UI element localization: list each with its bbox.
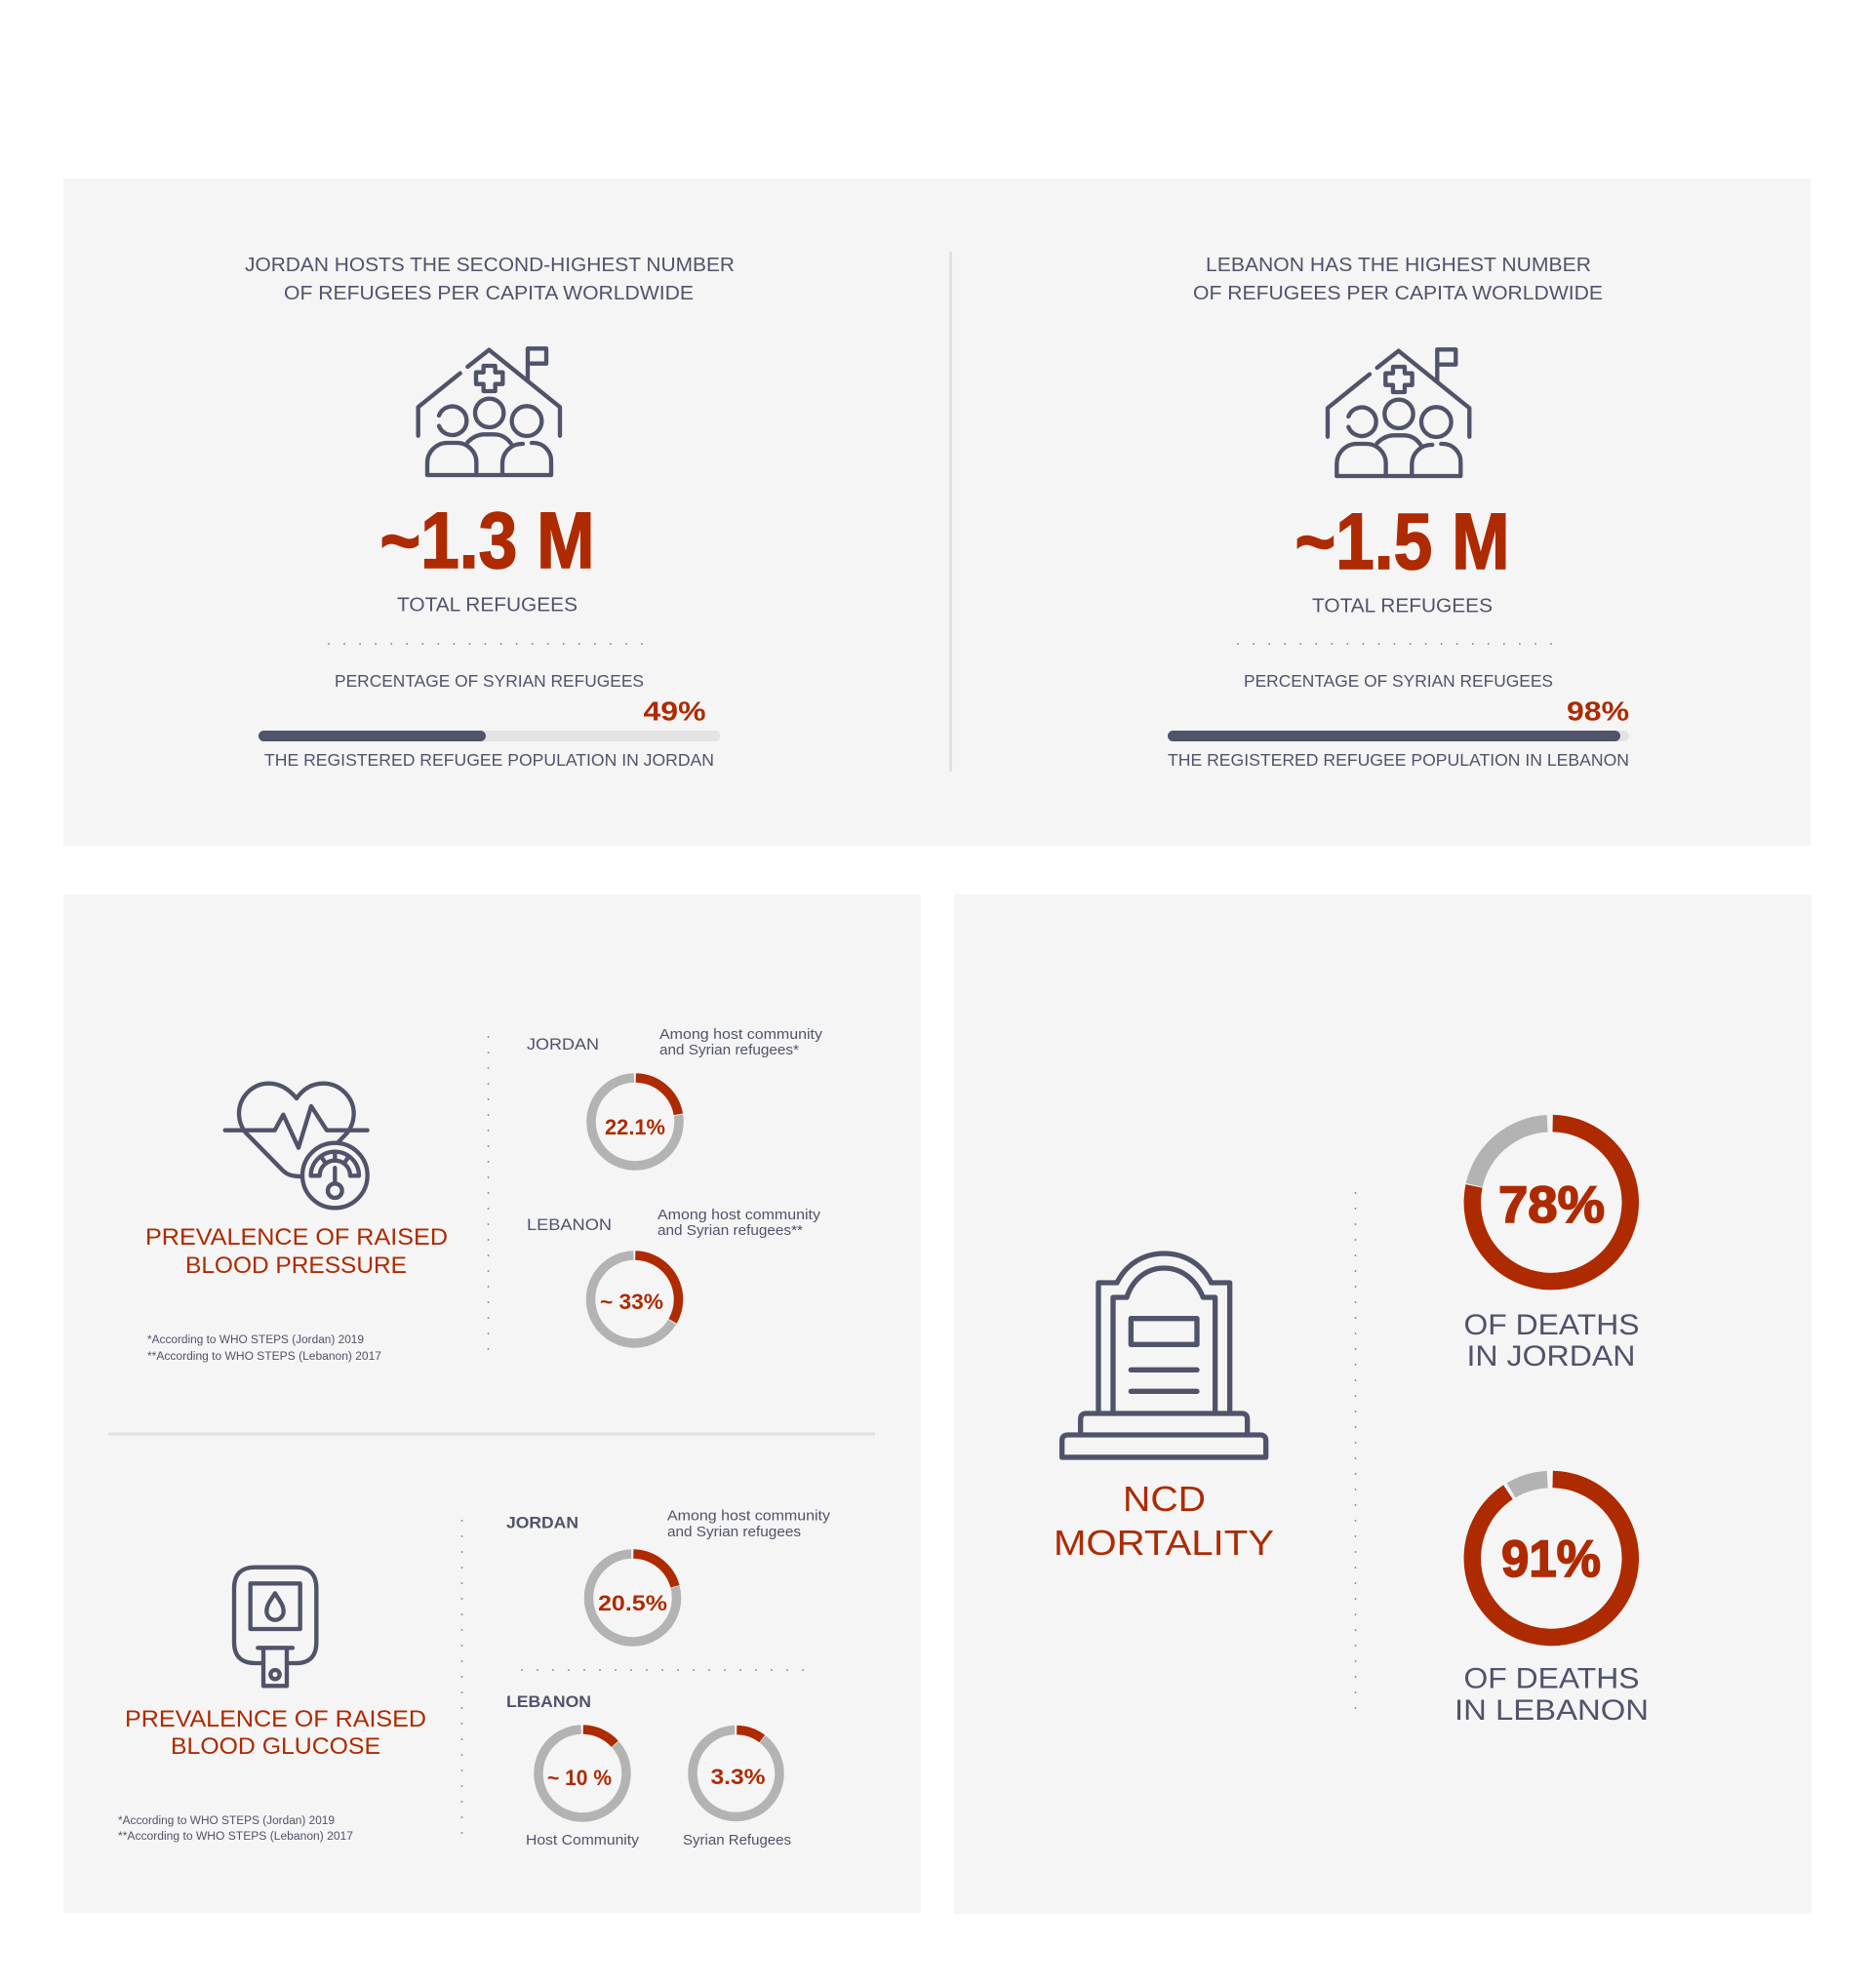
donut: Lebanon deaths 91 percent: 91% <box>1501 1531 1601 1588</box>
icon: heart with gauge <box>225 1084 368 1208</box>
icon: refugee shelter Lebanon <box>1328 349 1469 476</box>
donut: Jordan glucose 20.5 percent: 20.5% <box>598 1591 667 1615</box>
note: Jordan population <box>659 1027 823 1058</box>
panel: refugee numbers <box>63 179 1811 846</box>
heading: Lebanon refugees: LEBANON HAS THE HIGHEST NUMBER <box>1206 255 1591 276</box>
donut: host community about 10 percent <box>538 1729 627 1818</box>
heading: Jordan refugees: OF REFUGEES PER CAPITA WORLDWIDE <box>284 283 694 304</box>
label: Syrian refugees: Syrian Refugees <box>683 1833 791 1849</box>
note: Lebanon population: Among host community <box>658 1208 821 1223</box>
stat: 98 percent: 98% <box>1567 696 1629 726</box>
heading: Lebanon refugees: OF REFUGEES PER CAPITA WORLDWIDE <box>1193 283 1603 304</box>
label: Lebanon blood pressure: LEBANON <box>527 1216 612 1234</box>
label: total refugees Lebanon: TOTAL REFUGEES <box>1312 595 1493 616</box>
donut: Jordan blood pressure 22.1 percent: 22.1% <box>605 1115 665 1139</box>
label: deaths in Jordan: IN JORDAN <box>1467 1340 1635 1372</box>
footnotes: blood glucose <box>118 1815 353 1843</box>
stat: Lebanon total refugees: ~1.5 M <box>1295 497 1510 586</box>
label: total refugees Jordan: TOTAL REFUGEES <box>397 595 578 616</box>
label: deaths in Lebanon <box>1455 1662 1649 1727</box>
footnotes: blood glucose: **According to WHO STEPS (Lebanon) 2017 <box>118 1831 353 1843</box>
caption: registered population Lebanon: THE REGISTERED REFUGEE POPULATION IN LEBANON <box>1168 750 1629 770</box>
title: NCD mortality: MORTALITY <box>1054 1523 1274 1563</box>
note: Jordan population: Among host community <box>659 1027 823 1043</box>
icon: glucose meter <box>234 1568 316 1686</box>
icon: tombstone <box>1062 1253 1266 1457</box>
title: NCD mortality: NCD <box>1123 1479 1206 1519</box>
label: deaths in Jordan: OF DEATHS <box>1463 1309 1639 1341</box>
donut: Lebanon deaths 91 percent <box>1470 1478 1632 1639</box>
donut: Jordan glucose 20.5 percent <box>588 1553 677 1643</box>
label: Lebanon glucose: LEBANON <box>506 1693 591 1711</box>
caption: registered population Jordan: THE REGISTERED REFUGEE POPULATION IN JORDAN <box>264 750 714 770</box>
footnotes: blood glucose: *According to WHO STEPS (Jordan) 2019 <box>118 1815 335 1827</box>
label: Jordan blood pressure: JORDAN <box>527 1036 599 1054</box>
label: Jordan glucose: JORDAN <box>506 1514 578 1531</box>
note: Jordan glucose population: and Syrian refugees <box>667 1525 801 1540</box>
donut: Jordan deaths 78 percent <box>1470 1122 1632 1284</box>
donut: Lebanon blood pressure 33 percent: ~ 33% <box>600 1290 663 1314</box>
stat: 49 percent: 49% <box>644 696 706 726</box>
donut: Jordan blood pressure 22.1 percent <box>590 1077 680 1167</box>
panel: NCD mortality <box>954 895 1812 1914</box>
label: percentage Lebanon: PERCENTAGE OF SYRIAN REFUGEES <box>1244 671 1553 691</box>
note: Lebanon population <box>658 1208 821 1239</box>
label: deaths in Jordan <box>1463 1309 1639 1372</box>
donut: Jordan deaths 78 percent: 78% <box>1498 1176 1605 1234</box>
donut: host community about 10 percent: ~ 10 % <box>547 1766 612 1790</box>
title: blood pressure <box>145 1224 448 1279</box>
title: blood pressure: PREVALENCE OF RAISED <box>145 1224 448 1251</box>
title: blood pressure: BLOOD PRESSURE <box>185 1252 407 1279</box>
stat: Jordan total refugees: ~1.3 M <box>380 497 595 585</box>
heading: Jordan refugees: JORDAN HOSTS THE SECOND-HIGHEST NUMBER <box>245 255 735 276</box>
label: host community: Host Community <box>526 1833 640 1849</box>
donut: Lebanon blood pressure 33 percent <box>590 1254 679 1344</box>
panel: blood pressure and glucose <box>63 895 921 1913</box>
note: Lebanon population: and Syrian refugees** <box>658 1223 803 1239</box>
footnotes: blood pressure: *According to WHO STEPS (Jordan) 2019 <box>147 1334 364 1346</box>
note: Jordan glucose population: Among host community <box>667 1508 831 1524</box>
title: blood glucose <box>125 1706 426 1760</box>
donut: Syrian refugees 3.3 percent: 3.3% <box>710 1765 765 1789</box>
heading: Jordan refugees <box>245 255 735 304</box>
note: Jordan glucose population <box>667 1508 831 1540</box>
icon: refugee shelter Jordan <box>418 348 560 475</box>
progress bar: Jordan <box>259 731 720 741</box>
label: deaths in Lebanon: IN LEBANON <box>1455 1694 1649 1727</box>
title: blood glucose: PREVALENCE OF RAISED <box>125 1706 426 1732</box>
label: deaths in Lebanon: OF DEATHS <box>1463 1662 1639 1695</box>
title: blood glucose: BLOOD GLUCOSE <box>171 1733 380 1760</box>
label: percentage Jordan: PERCENTAGE OF SYRIAN REFUGEES <box>335 671 644 691</box>
progress bar: Lebanon <box>1168 731 1629 741</box>
donut: Syrian refugees 3.3 percent <box>692 1730 780 1817</box>
note: Jordan population: and Syrian refugees* <box>659 1043 799 1058</box>
footnotes: blood pressure: **According to WHO STEPS (Lebanon) 2017 <box>147 1351 381 1363</box>
title: NCD mortality <box>1054 1479 1274 1563</box>
footnotes: blood pressure <box>147 1334 381 1363</box>
heading: Lebanon refugees <box>1193 255 1603 304</box>
